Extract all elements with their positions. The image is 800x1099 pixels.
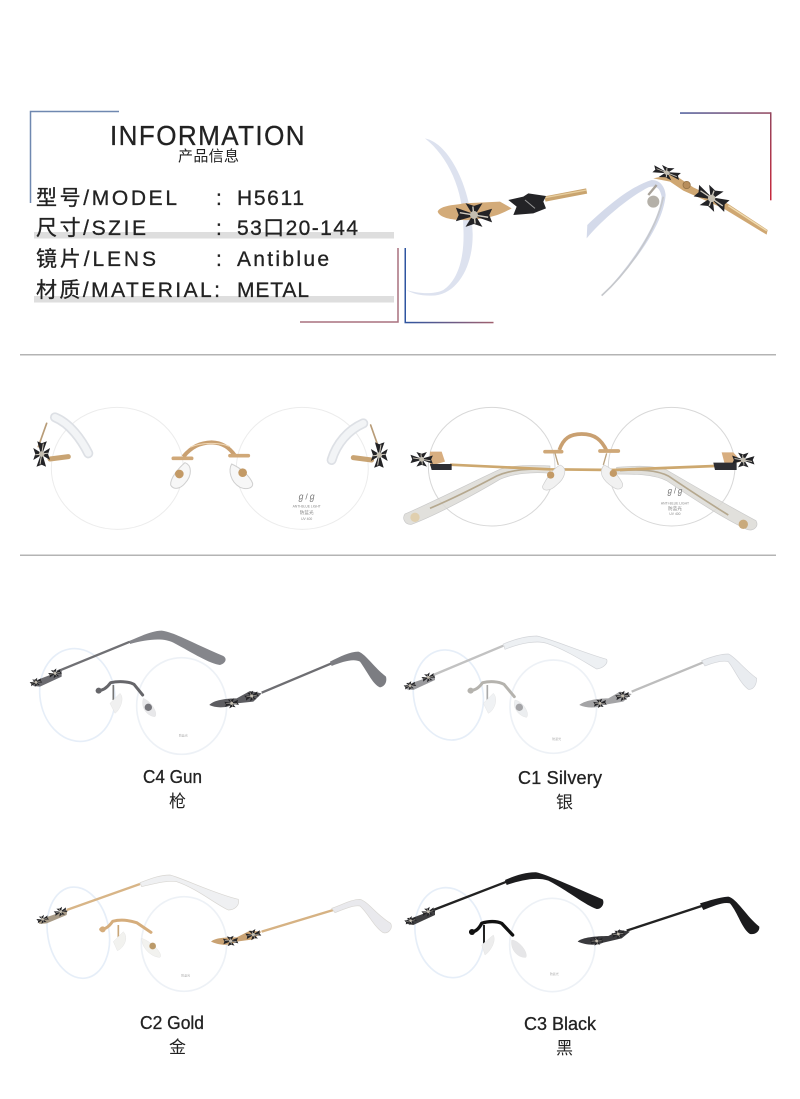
glasses: gold: 防蓝光	[181, 973, 190, 978]
glasses: gun: 防蓝光	[179, 733, 188, 738]
row: lens: :	[216, 248, 222, 271]
row: model: 型号/MODEL	[36, 187, 177, 210]
temple star left	[410, 513, 420, 522]
lens mark	[661, 486, 689, 516]
lens mark: 防蓝光	[300, 509, 314, 516]
subheading: 产品信息	[178, 148, 239, 165]
label: C3 Black: C3 Black	[524, 1014, 597, 1034]
bridge	[173, 442, 248, 458]
glasses: black: 防蓝光	[550, 971, 559, 976]
right lens	[608, 407, 735, 526]
blue corner bracket	[404, 248, 494, 323]
glasses: gold	[36, 875, 391, 991]
row: lens	[36, 248, 329, 271]
row: material: 材质/MATERIAL:	[36, 279, 220, 302]
right hinge	[713, 452, 754, 470]
lens mark: UV 400	[669, 512, 681, 516]
row highlight bar: material	[34, 296, 394, 302]
label: 金: 金	[169, 1038, 186, 1057]
right temple	[332, 423, 388, 468]
glasses: gun	[29, 631, 386, 754]
top right corner bracket	[680, 112, 772, 200]
lens mark: ℊ/ℊ	[666, 486, 684, 496]
lens mark: ℊ/ℊ	[297, 491, 316, 502]
blue corner bracket	[30, 112, 119, 203]
divider	[20, 354, 776, 356]
label: C2 Gold: C2 Gold	[140, 1013, 204, 1033]
left temple	[33, 417, 88, 467]
lens mark: 防蓝光	[668, 505, 682, 512]
panel: folded view glasses	[404, 407, 757, 530]
row: size: 53口20-144	[237, 217, 358, 240]
row: size	[36, 217, 358, 240]
row: model	[36, 187, 304, 210]
folded metal rods	[450, 465, 715, 470]
lens mark: UV 400	[301, 517, 312, 521]
lens mark: ANTI-BLUE LIGHT	[661, 501, 689, 505]
nose pad right	[601, 465, 623, 489]
nose pad left	[543, 465, 565, 490]
row: lens: Antiblue	[237, 248, 329, 271]
panel: C1 Silvery	[403, 636, 757, 812]
nose pad right	[230, 464, 253, 489]
lens mark: ANTI-BLUE LIGHT	[293, 505, 321, 509]
panel: hinge close-ups	[404, 112, 772, 323]
left lens	[428, 407, 555, 526]
left clear temple tip	[404, 465, 550, 524]
panel: product information	[30, 112, 398, 322]
close-up: outer hinge	[407, 138, 587, 296]
row: size: :	[216, 217, 222, 240]
label: 黑: 黑	[556, 1039, 573, 1058]
left lens	[51, 407, 183, 529]
row: size: 尺寸/SZIE	[36, 217, 146, 240]
red corner bracket	[300, 248, 398, 322]
label: 银: 银	[556, 793, 573, 812]
right clear temple tip	[617, 466, 757, 530]
nose pad left	[171, 463, 190, 488]
temple star right	[739, 520, 748, 529]
panel: front view glasses	[33, 407, 388, 529]
bridge	[545, 434, 618, 465]
panel: C4 Gun	[29, 631, 386, 811]
label: 枪: 枪	[169, 792, 186, 811]
heading: INFORMATION	[110, 120, 306, 151]
close-up: inner hinge	[587, 163, 768, 296]
panel: C2 Gold	[36, 875, 391, 1057]
lens mark	[293, 491, 321, 521]
row: model: H5611	[237, 187, 304, 210]
glasses: silvery	[403, 636, 757, 753]
row: model: :	[216, 187, 222, 210]
row: material: METAL	[237, 279, 309, 302]
row highlight bar: size	[34, 232, 394, 238]
right lens	[236, 407, 368, 529]
label: C1 Silvery: C1 Silvery	[518, 768, 602, 788]
glasses: silvery: 防蓝光	[552, 736, 561, 741]
divider	[20, 554, 776, 556]
panel: C3 Black	[404, 872, 759, 1058]
left hinge	[410, 452, 452, 470]
label: C4 Gun: C4 Gun	[143, 767, 202, 787]
row: material	[36, 279, 309, 302]
glasses: black	[404, 872, 759, 992]
row: lens: 镜片/LENS	[36, 248, 156, 271]
